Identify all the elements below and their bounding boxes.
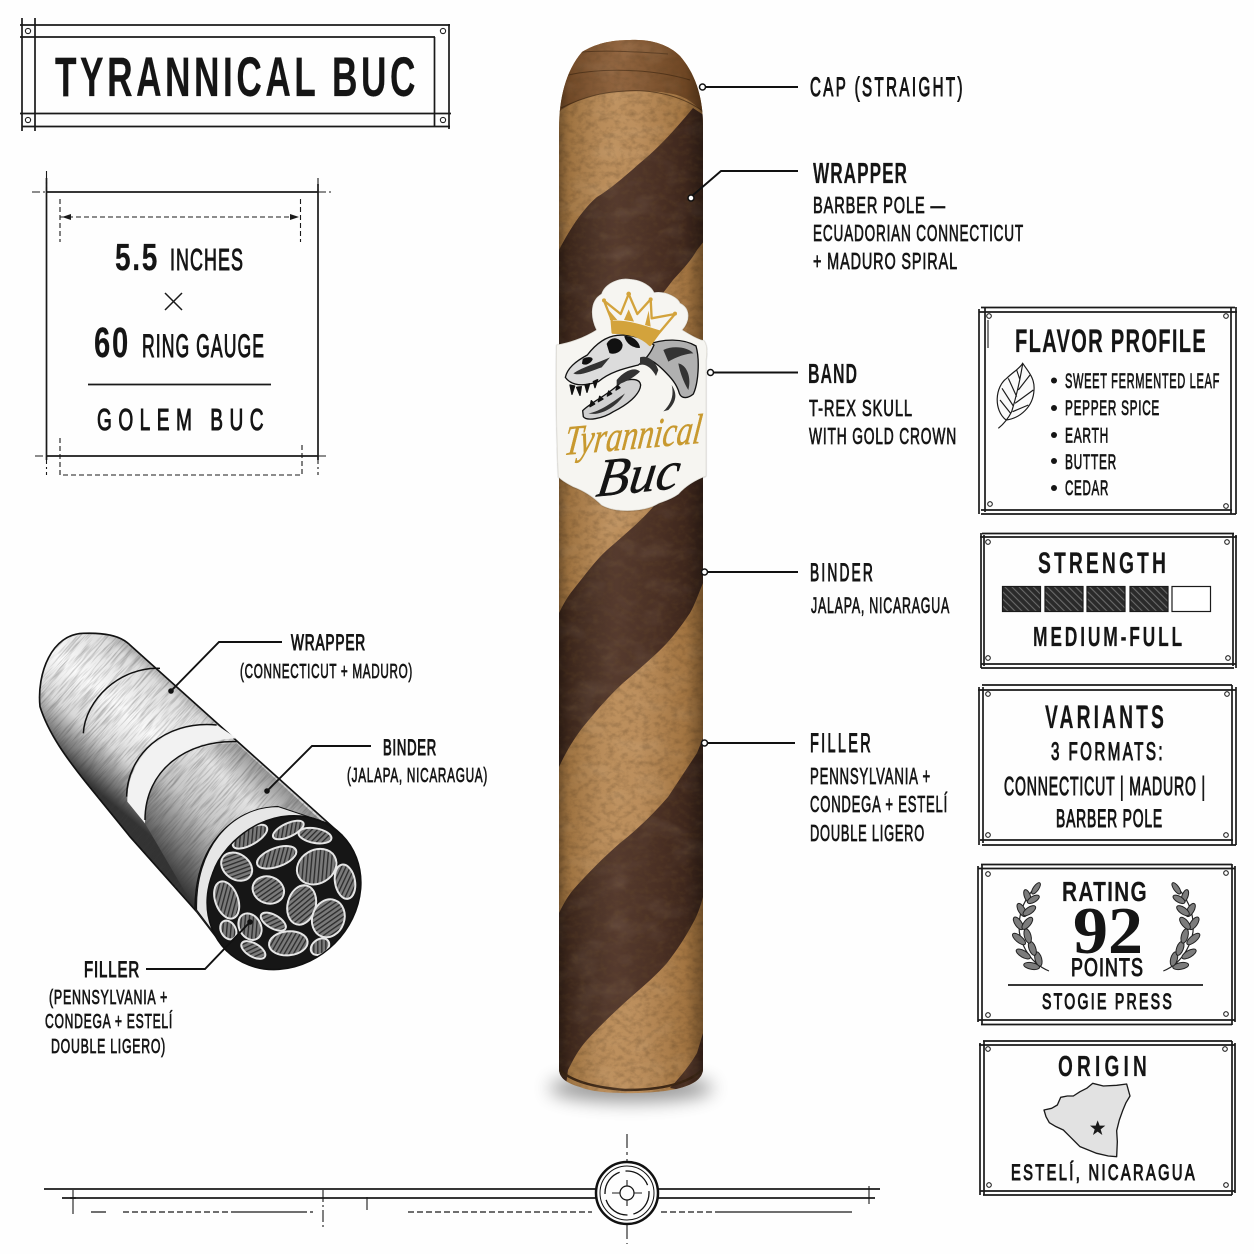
gold crown — [602, 292, 677, 345]
seam lines — [83, 668, 278, 910]
upper jaw — [565, 335, 654, 385]
label: binder section: (JALAPA, NICARAGUA) — [347, 765, 488, 787]
panel: origin — [979, 1041, 1235, 1195]
skull shading — [573, 347, 693, 414]
flavor list — [1051, 370, 1220, 500]
technical ruler — [44, 1134, 880, 1244]
label: wrapper section: (CONNECTICUT + MADURO) — [240, 661, 413, 683]
script: Tyrannical: Tyrannical — [562, 406, 705, 465]
icon: leaf — [997, 363, 1034, 428]
variants text: 3 FORMATS: — [1051, 738, 1165, 766]
bottom rim — [560, 1070, 702, 1090]
cigar shadow — [549, 1074, 713, 1102]
rating score: 92 — [1073, 894, 1143, 968]
target — [596, 1134, 658, 1244]
band label shape — [556, 279, 707, 510]
size: 5.5 inches: INCHES — [170, 242, 244, 277]
icon: star — [1090, 1120, 1105, 1135]
label: filler section — [45, 919, 253, 1058]
heading: ORIGIN — [1058, 1051, 1151, 1083]
script: Buc: Buc — [593, 440, 685, 509]
multiply sign — [165, 293, 182, 310]
callout: wrapper: BARBER POLE — — [813, 192, 946, 218]
callout: wrapper: WRAPPER — [813, 158, 908, 190]
size: 60 ring gauge: 60 — [94, 319, 130, 367]
callout: binder: BINDER — [810, 559, 875, 587]
panel: rating — [978, 864, 1235, 1025]
lower jaw — [583, 379, 641, 419]
callout: band — [708, 358, 957, 449]
callout: band: BAND — [808, 358, 858, 389]
size: 5.5 inches: 5.5 — [115, 237, 159, 279]
rating unit: POINTS — [1071, 954, 1144, 982]
heading: VARIANTS — [1045, 699, 1167, 735]
filler end — [176, 784, 392, 1001]
cap — [560, 40, 702, 112]
strength meter — [1002, 586, 1210, 612]
rating heading: RATING — [1062, 876, 1148, 907]
engraving texture — [40, 634, 325, 891]
callout: wrapper: + MADURO SPIRAL — [813, 248, 958, 274]
vitola name: GOLEM BUC — [97, 402, 270, 437]
cross-section illustration — [38, 632, 362, 970]
filler leaves — [209, 817, 358, 962]
size: 5.5 inches — [115, 237, 244, 279]
panel: variants — [978, 685, 1236, 845]
callout: band: WITH GOLD CROWN — [809, 423, 957, 449]
stripe 2 — [559, 478, 703, 767]
heading: Tyrannical Buc: TYRANNICAL BUC — [55, 45, 419, 108]
size: 60 ring gauge: RING GAUGE — [142, 328, 265, 364]
flavor list: PEPPER SPICE — [1065, 397, 1160, 420]
callout: binder: JALAPA, NICARAGUA — [811, 593, 950, 618]
stripe 3 — [555, 730, 708, 1085]
panel: strength — [980, 533, 1237, 668]
binder layer — [145, 743, 320, 932]
label: filler section: (PENNSYLVANIA + — [49, 987, 168, 1009]
callout: wrapper — [688, 158, 1024, 274]
panel: flavor profile — [979, 307, 1237, 514]
callout: filler — [702, 728, 948, 846]
label: wrapper section — [168, 630, 413, 694]
t-rex skull — [565, 335, 698, 419]
rating source: STOGIE PRESS — [1042, 989, 1174, 1014]
label: filler section: FILLER — [84, 957, 140, 982]
label: binder section: BINDER — [383, 735, 437, 760]
end ring — [197, 807, 328, 950]
cigar band — [556, 279, 707, 510]
cigar body — [40, 633, 342, 951]
eye and nasal holes — [583, 337, 639, 364]
back of skull — [647, 340, 698, 398]
label: binder section — [264, 735, 488, 794]
callout: filler: DOUBLE LIGERO — [810, 820, 925, 846]
flavor list: CEDAR — [1065, 477, 1109, 500]
variants text: BARBER POLE — [1056, 805, 1163, 833]
callout: cap — [700, 72, 965, 102]
size: 60 ring gauge — [94, 319, 265, 367]
heading: STRENGTH — [1038, 547, 1169, 580]
panel: dimensions — [32, 171, 333, 475]
callout: cap: CAP (STRAIGHT) — [810, 72, 965, 102]
callout: binder — [702, 559, 950, 618]
label: filler section: CONDEGA + ESTELÍ — [45, 1010, 173, 1033]
callout: filler: FILLER — [810, 728, 873, 758]
callout: filler: PENNSYLVANIA + — [810, 763, 931, 789]
stripe 1 — [559, 108, 703, 344]
label: wrapper section: WRAPPER — [291, 630, 366, 655]
variants text — [1004, 738, 1206, 833]
flavor list: BUTTER — [1065, 451, 1117, 474]
label: filler section: DOUBLE LIGERO) — [51, 1036, 166, 1058]
callout: filler: CONDEGA + ESTELÍ — [810, 791, 948, 817]
map of Nicaragua — [1044, 1083, 1130, 1157]
icon: laurel wreath — [1011, 881, 1202, 971]
white inner layer band — [127, 725, 237, 823]
title plate — [20, 18, 451, 131]
callout: wrapper: ECUADORIAN CONNECTICUT — [813, 220, 1024, 246]
flavor list: EARTH — [1065, 424, 1109, 448]
stripe 4 — [670, 1033, 703, 1089]
callout: band: T-REX SKULL — [809, 395, 913, 421]
cigar — [555, 30, 708, 1100]
teeth — [570, 380, 620, 407]
